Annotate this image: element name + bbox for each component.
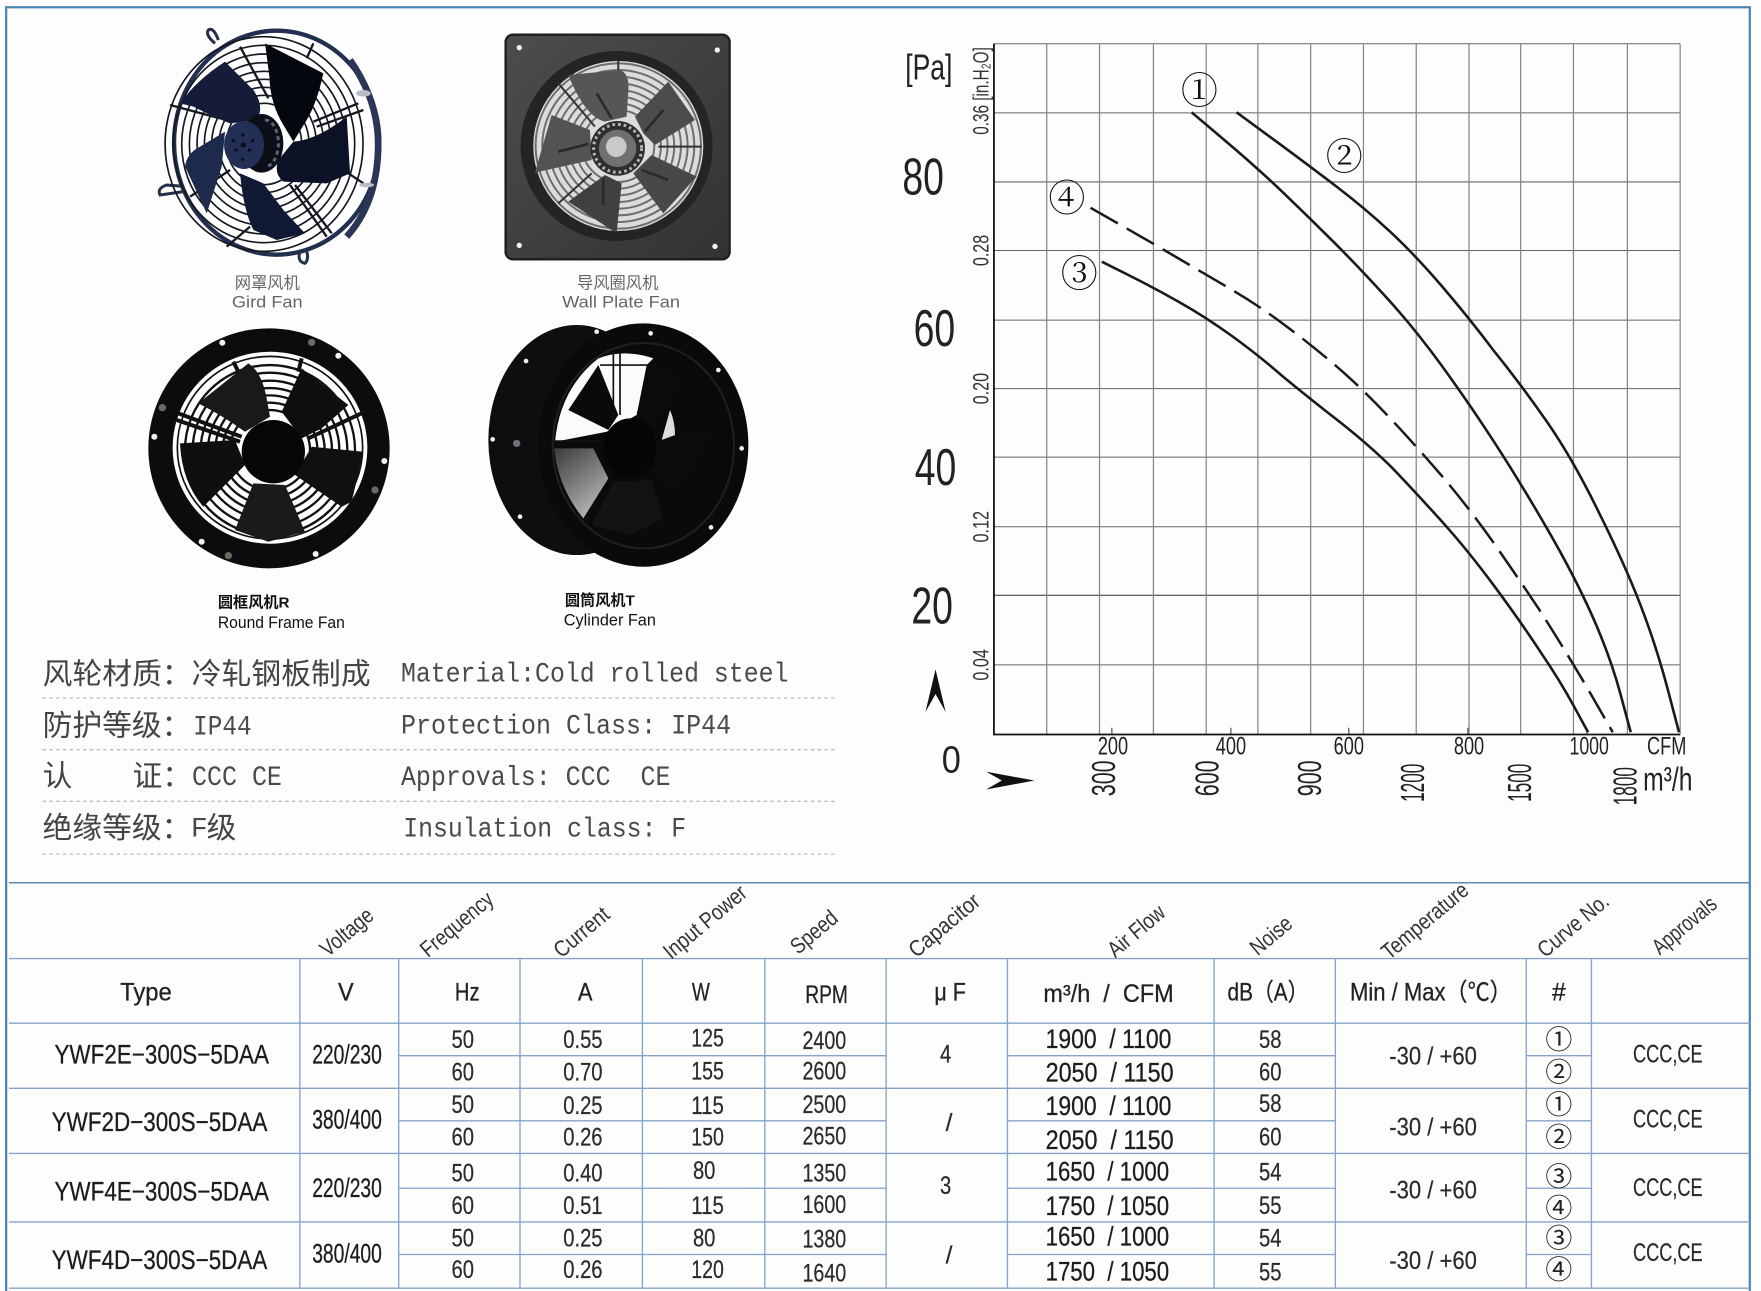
table row: YWF2D-300S-5DAA xyxy=(52,1083,1703,1155)
y axis: inches of water labels xyxy=(968,47,993,681)
table row: YWF2E-300S-5DAA: 60 xyxy=(451,1059,474,1086)
table row: YWF4D-300S-5DAA: CCC,CE xyxy=(1633,1240,1703,1267)
curve labels xyxy=(1048,60,1363,297)
curve 2 xyxy=(1237,112,1679,732)
text: insulation class: F xyxy=(191,815,208,846)
curve labels: ② xyxy=(1326,127,1363,181)
caption: gird fan: 网罩风机 xyxy=(235,275,300,293)
text: insulation class xyxy=(43,812,686,846)
table row: YWF4E-300S-5DAA: CCC,CE xyxy=(1633,1175,1703,1202)
table row: YWF4E-300S-5DAA: 0.51 xyxy=(563,1193,603,1220)
table: unit header row: # xyxy=(1552,980,1566,1007)
table row: YWF2E-300S-5DAA: -30 / +60 xyxy=(1389,1044,1477,1071)
table row: YWF4E-300S-5DAA: 1600 xyxy=(802,1192,846,1219)
table row: YWF2E-300S-5DAA: 0.55 xyxy=(563,1027,603,1054)
x axis: cubic metres per hour labels: m³/h xyxy=(1643,762,1693,799)
x axis: CFM labels: 400 xyxy=(1216,734,1246,761)
table row: YWF2D-300S-5DAA: / xyxy=(946,1110,953,1137)
caption: round frame fan: 圆框风机R xyxy=(218,594,290,612)
table row: YWF4E-300S-5DAA: YWF4E−300S−5DAA xyxy=(54,1177,269,1207)
icon: cylinder fan xyxy=(488,323,748,567)
caption: gird fan xyxy=(232,275,303,312)
table: model specifications xyxy=(9,877,1750,1288)
table row: YWF4E-300S-5DAA: 3 xyxy=(940,1173,951,1200)
table: rotated column titles: Speed xyxy=(785,905,843,959)
table row: YWF2E-300S-5DAA: 60 xyxy=(1259,1059,1281,1086)
panel: material and class specifications xyxy=(43,658,834,854)
caption: wall plate fan: 导风圈风机 xyxy=(577,275,658,293)
table row: YWF4D-300S-5DAA: 50 xyxy=(451,1226,474,1253)
table: unit header row: Hz xyxy=(455,980,480,1007)
curve labels: ① xyxy=(1181,60,1218,114)
table row: YWF4D-300S-5DAA xyxy=(52,1217,1703,1287)
table row: YWF2E-300S-5DAA: 2600 xyxy=(802,1058,846,1085)
x axis: CFM labels: CFM xyxy=(1647,734,1686,761)
table row: YWF4D-300S-5DAA: 0.26 xyxy=(563,1257,603,1284)
text: protection class: Protection Class: IP44 xyxy=(401,711,731,742)
table row: YWF2D-300S-5DAA: CCC,CE xyxy=(1633,1107,1703,1134)
table: rotated column titles: Capacitor xyxy=(903,888,985,962)
table row: YWF2E-300S-5DAA: ② xyxy=(1545,1051,1572,1090)
y axis: inches of water labels: 0.12 xyxy=(968,511,993,542)
curve labels: ③ xyxy=(1061,243,1098,297)
arrow: pressure axis xyxy=(925,669,946,712)
text: protection class: 防护等级： xyxy=(43,710,191,743)
x axis: cubic metres per hour labels: 1500 xyxy=(1502,764,1539,802)
y axis: pascal labels: 80 xyxy=(902,147,944,205)
x axis: CFM labels: 800 xyxy=(1454,734,1484,761)
table row: YWF4E-300S-5DAA: 80 xyxy=(693,1158,715,1185)
table row: YWF2E-300S-5DAA: 1900 / 1100 xyxy=(1046,1024,1171,1054)
table row: YWF2E-300S-5DAA: ① xyxy=(1545,1018,1572,1057)
table row: YWF2D-300S-5DAA: 0.26 xyxy=(563,1125,603,1152)
table row: YWF4E-300S-5DAA: 55 xyxy=(1259,1193,1281,1220)
table: rotated column titles: Approvals xyxy=(1647,891,1722,959)
table row: YWF4E-300S-5DAA: 50 xyxy=(451,1161,474,1188)
table row: YWF4E-300S-5DAA: 1750 / 1050 xyxy=(1046,1191,1169,1221)
table: rotated column titles: Frequency xyxy=(415,886,499,962)
table: rotated column titles: Current xyxy=(548,901,615,963)
table: unit header row xyxy=(120,979,1566,1009)
table row: YWF4E-300S-5DAA: 1350 xyxy=(802,1161,846,1188)
table row: YWF4D-300S-5DAA: 1750 / 1050 xyxy=(1046,1256,1169,1286)
table row: YWF4D-300S-5DAA: 1650 / 1000 xyxy=(1046,1222,1169,1252)
table row: YWF4D-300S-5DAA: ④ xyxy=(1545,1248,1572,1287)
y axis: pascal labels: 20 xyxy=(911,576,953,634)
table row: YWF2D-300S-5DAA: 380/400 xyxy=(312,1105,382,1135)
table: rotated column titles: Temperature xyxy=(1376,877,1473,964)
table row: YWF2D-300S-5DAA: -30 / +60 xyxy=(1389,1114,1477,1141)
table: unit header row: V xyxy=(338,980,354,1007)
x axis: cubic metres per hour labels xyxy=(1086,760,1693,805)
table row: YWF4E-300S-5DAA: 115 xyxy=(691,1193,724,1220)
table row: YWF2E-300S-5DAA: 50 xyxy=(451,1027,474,1054)
table row: YWF2E-300S-5DAA: 2050 / 1150 xyxy=(1046,1058,1174,1088)
text: protection class: IP44 xyxy=(193,713,252,744)
caption: round frame fan: Round Frame Fan xyxy=(218,614,345,632)
table row: YWF4E-300S-5DAA xyxy=(54,1155,1703,1225)
text: insulation class: 绝缘等级： xyxy=(43,812,191,845)
table: rotated column titles: Voltage xyxy=(315,903,378,961)
caption: wall plate fan xyxy=(562,275,680,312)
table row: YWF4D-300S-5DAA: 120 xyxy=(691,1257,724,1284)
text: approvals: Approvals: CCC CE xyxy=(401,763,670,794)
y axis: inches of water labels: 0.36 [in.H₂O] xyxy=(968,47,993,135)
table: unit header row: m³/h / CFM xyxy=(1043,981,1174,1008)
curve labels: ④ xyxy=(1048,168,1085,222)
x axis: cubic metres per hour labels: 1800 xyxy=(1607,767,1644,805)
table row: YWF2D-300S-5DAA: 115 xyxy=(691,1093,724,1120)
y axis: pascal labels: 0 xyxy=(942,739,961,782)
chart: fan performance curves xyxy=(902,44,1693,805)
table: unit header row: dB（A） xyxy=(1228,979,1308,1007)
table: rotated column titles: Input Power xyxy=(658,880,752,964)
y axis: pascal labels xyxy=(902,47,961,782)
table row: YWF4D-300S-5DAA: / xyxy=(946,1242,953,1269)
table row: YWF2D-300S-5DAA: ① xyxy=(1545,1083,1572,1122)
table: rotated column titles: Curve No. xyxy=(1532,888,1614,962)
caption: wall plate fan: Wall Plate Fan xyxy=(562,294,680,312)
y axis: pascal labels: [Pa] xyxy=(905,47,952,88)
x axis: CFM labels: 1000 xyxy=(1570,734,1609,761)
table: unit header row: μ F xyxy=(934,980,966,1007)
table row: YWF2D-300S-5DAA: ② xyxy=(1545,1116,1572,1155)
table row: YWF4D-300S-5DAA: 80 xyxy=(693,1226,715,1253)
x axis: cubic metres per hour labels: 600 xyxy=(1190,760,1227,796)
arrow: airflow axis xyxy=(986,772,1034,790)
table row: YWF4E-300S-5DAA: -30 / +60 xyxy=(1389,1177,1477,1204)
table row: YWF2D-300S-5DAA: YWF2D−300S−5DAA xyxy=(52,1107,267,1137)
y axis: inches of water labels: 0.28 xyxy=(968,235,993,266)
table: unit header row: A xyxy=(578,980,593,1007)
x axis: CFM labels: 600 xyxy=(1334,734,1364,761)
caption: cylinder fan: Cylinder Fan xyxy=(564,612,656,630)
table: rotated column titles xyxy=(315,877,1722,964)
table row: YWF2D-300S-5DAA: 60 xyxy=(1259,1125,1281,1152)
x axis: CFM labels xyxy=(1098,734,1686,761)
table row: YWF4D-300S-5DAA: 55 xyxy=(1259,1259,1281,1286)
text: approvals: CCC CE xyxy=(192,763,282,794)
table row: YWF4D-300S-5DAA: 1640 xyxy=(802,1260,846,1287)
table row: YWF4D-300S-5DAA: 54 xyxy=(1259,1226,1281,1253)
table row: YWF2D-300S-5DAA: 1900 / 1100 xyxy=(1046,1091,1171,1121)
table row: YWF4D-300S-5DAA: -30 / +60 xyxy=(1389,1248,1477,1275)
table row: YWF4D-300S-5DAA: 60 xyxy=(451,1257,474,1284)
caption: cylinder fan: 圆筒风机T xyxy=(565,591,636,609)
table row: YWF4D-300S-5DAA: ③ xyxy=(1545,1217,1572,1256)
table row: YWF4D-300S-5DAA: 1380 xyxy=(802,1227,846,1254)
table row: YWF2D-300S-5DAA: 0.25 xyxy=(563,1093,603,1120)
table row: YWF2D-300S-5DAA: 58 xyxy=(1259,1091,1281,1118)
x axis: CFM labels: 200 xyxy=(1098,734,1128,761)
text: protection class xyxy=(43,710,731,744)
icon: gird fan xyxy=(159,29,379,263)
x axis: cubic metres per hour labels: 900 xyxy=(1292,760,1329,796)
y axis: pascal labels: 40 xyxy=(915,438,956,496)
table row: YWF2E-300S-5DAA xyxy=(54,1018,1703,1090)
table row: YWF4E-300S-5DAA: 60 xyxy=(451,1193,474,1220)
table: rotated column titles: Noise xyxy=(1245,911,1297,960)
table row: YWF2E-300S-5DAA: 4 xyxy=(940,1041,951,1068)
y axis: pascal labels: 60 xyxy=(914,299,955,357)
table row: YWF2D-300S-5DAA: 2500 xyxy=(802,1092,846,1119)
text: insulation class: Insulation class: F xyxy=(403,815,686,846)
curve 4 (dashed) xyxy=(1091,208,1613,732)
table row: YWF2D-300S-5DAA: 60 xyxy=(451,1125,474,1152)
y axis: inches of water labels: 0.04 xyxy=(968,649,993,681)
text: material: 风轮材质：冷轧钢板制成 xyxy=(43,658,371,691)
table row: YWF4E-300S-5DAA: 0.40 xyxy=(563,1161,603,1188)
table row: YWF4E-300S-5DAA: 54 xyxy=(1259,1159,1281,1186)
table row: YWF2E-300S-5DAA: 155 xyxy=(691,1058,724,1085)
caption: cylinder fan xyxy=(564,591,656,630)
table row: YWF4E-300S-5DAA: 1650 / 1000 xyxy=(1046,1156,1169,1186)
text: approvals: 证： xyxy=(133,760,192,793)
text: approvals xyxy=(43,760,670,794)
text: approvals: 认 xyxy=(43,760,72,793)
table row: YWF4E-300S-5DAA: ④ xyxy=(1545,1186,1572,1225)
table row: YWF2E-300S-5DAA: 125 xyxy=(691,1026,724,1053)
table row: YWF4D-300S-5DAA: YWF4D−300S−5DAA xyxy=(52,1245,267,1275)
table row: YWF2D-300S-5DAA: 2650 xyxy=(802,1123,846,1150)
icon: wall plate fan xyxy=(506,35,730,259)
y axis: inches of water labels: 0.20 xyxy=(968,373,993,404)
table row: YWF2D-300S-5DAA: 150 xyxy=(691,1125,724,1152)
table row: YWF2E-300S-5DAA: 2400 xyxy=(802,1028,846,1055)
curve 1 xyxy=(1192,112,1631,732)
table row: YWF2E-300S-5DAA: 220/230 xyxy=(312,1040,382,1070)
x axis: cubic metres per hour labels: 1200 xyxy=(1395,764,1432,802)
table: unit header row: Min / Max（℃） xyxy=(1350,979,1512,1007)
panel: fan product photos xyxy=(148,29,748,632)
table row: YWF2D-300S-5DAA: 2050 / 1150 xyxy=(1046,1125,1174,1155)
table: rotated column titles: Air Flow xyxy=(1102,899,1171,962)
caption: round frame fan xyxy=(218,594,345,632)
table row: YWF2D-300S-5DAA: 50 xyxy=(451,1092,474,1119)
x axis: cubic metres per hour labels: 300 xyxy=(1086,760,1123,796)
table: unit header row: RPM xyxy=(805,982,848,1009)
table row: YWF4E-300S-5DAA: ③ xyxy=(1545,1155,1572,1194)
table row: YWF4E-300S-5DAA: 220/230 xyxy=(312,1173,382,1203)
curve 3 xyxy=(1102,262,1588,732)
table: unit header row: Type xyxy=(120,980,172,1007)
text: material xyxy=(43,658,788,691)
text: insulation class: 级 xyxy=(207,812,236,845)
table row: YWF4D-300S-5DAA: 380/400 xyxy=(312,1238,382,1268)
table row: YWF4D-300S-5DAA: 0.25 xyxy=(563,1226,603,1253)
icon: round frame fan xyxy=(148,328,390,568)
table row: YWF2E-300S-5DAA: YWF2E−300S−5DAA xyxy=(54,1040,269,1070)
table row: YWF2E-300S-5DAA: 0.70 xyxy=(563,1059,603,1086)
text: material: Material:Cold rolled steel xyxy=(401,660,788,691)
table row: YWF2E-300S-5DAA: 58 xyxy=(1259,1027,1281,1054)
caption: gird fan: Gird Fan xyxy=(232,294,303,312)
table: unit header row: W xyxy=(692,980,710,1007)
table row: YWF2E-300S-5DAA: CCC,CE xyxy=(1633,1041,1703,1068)
